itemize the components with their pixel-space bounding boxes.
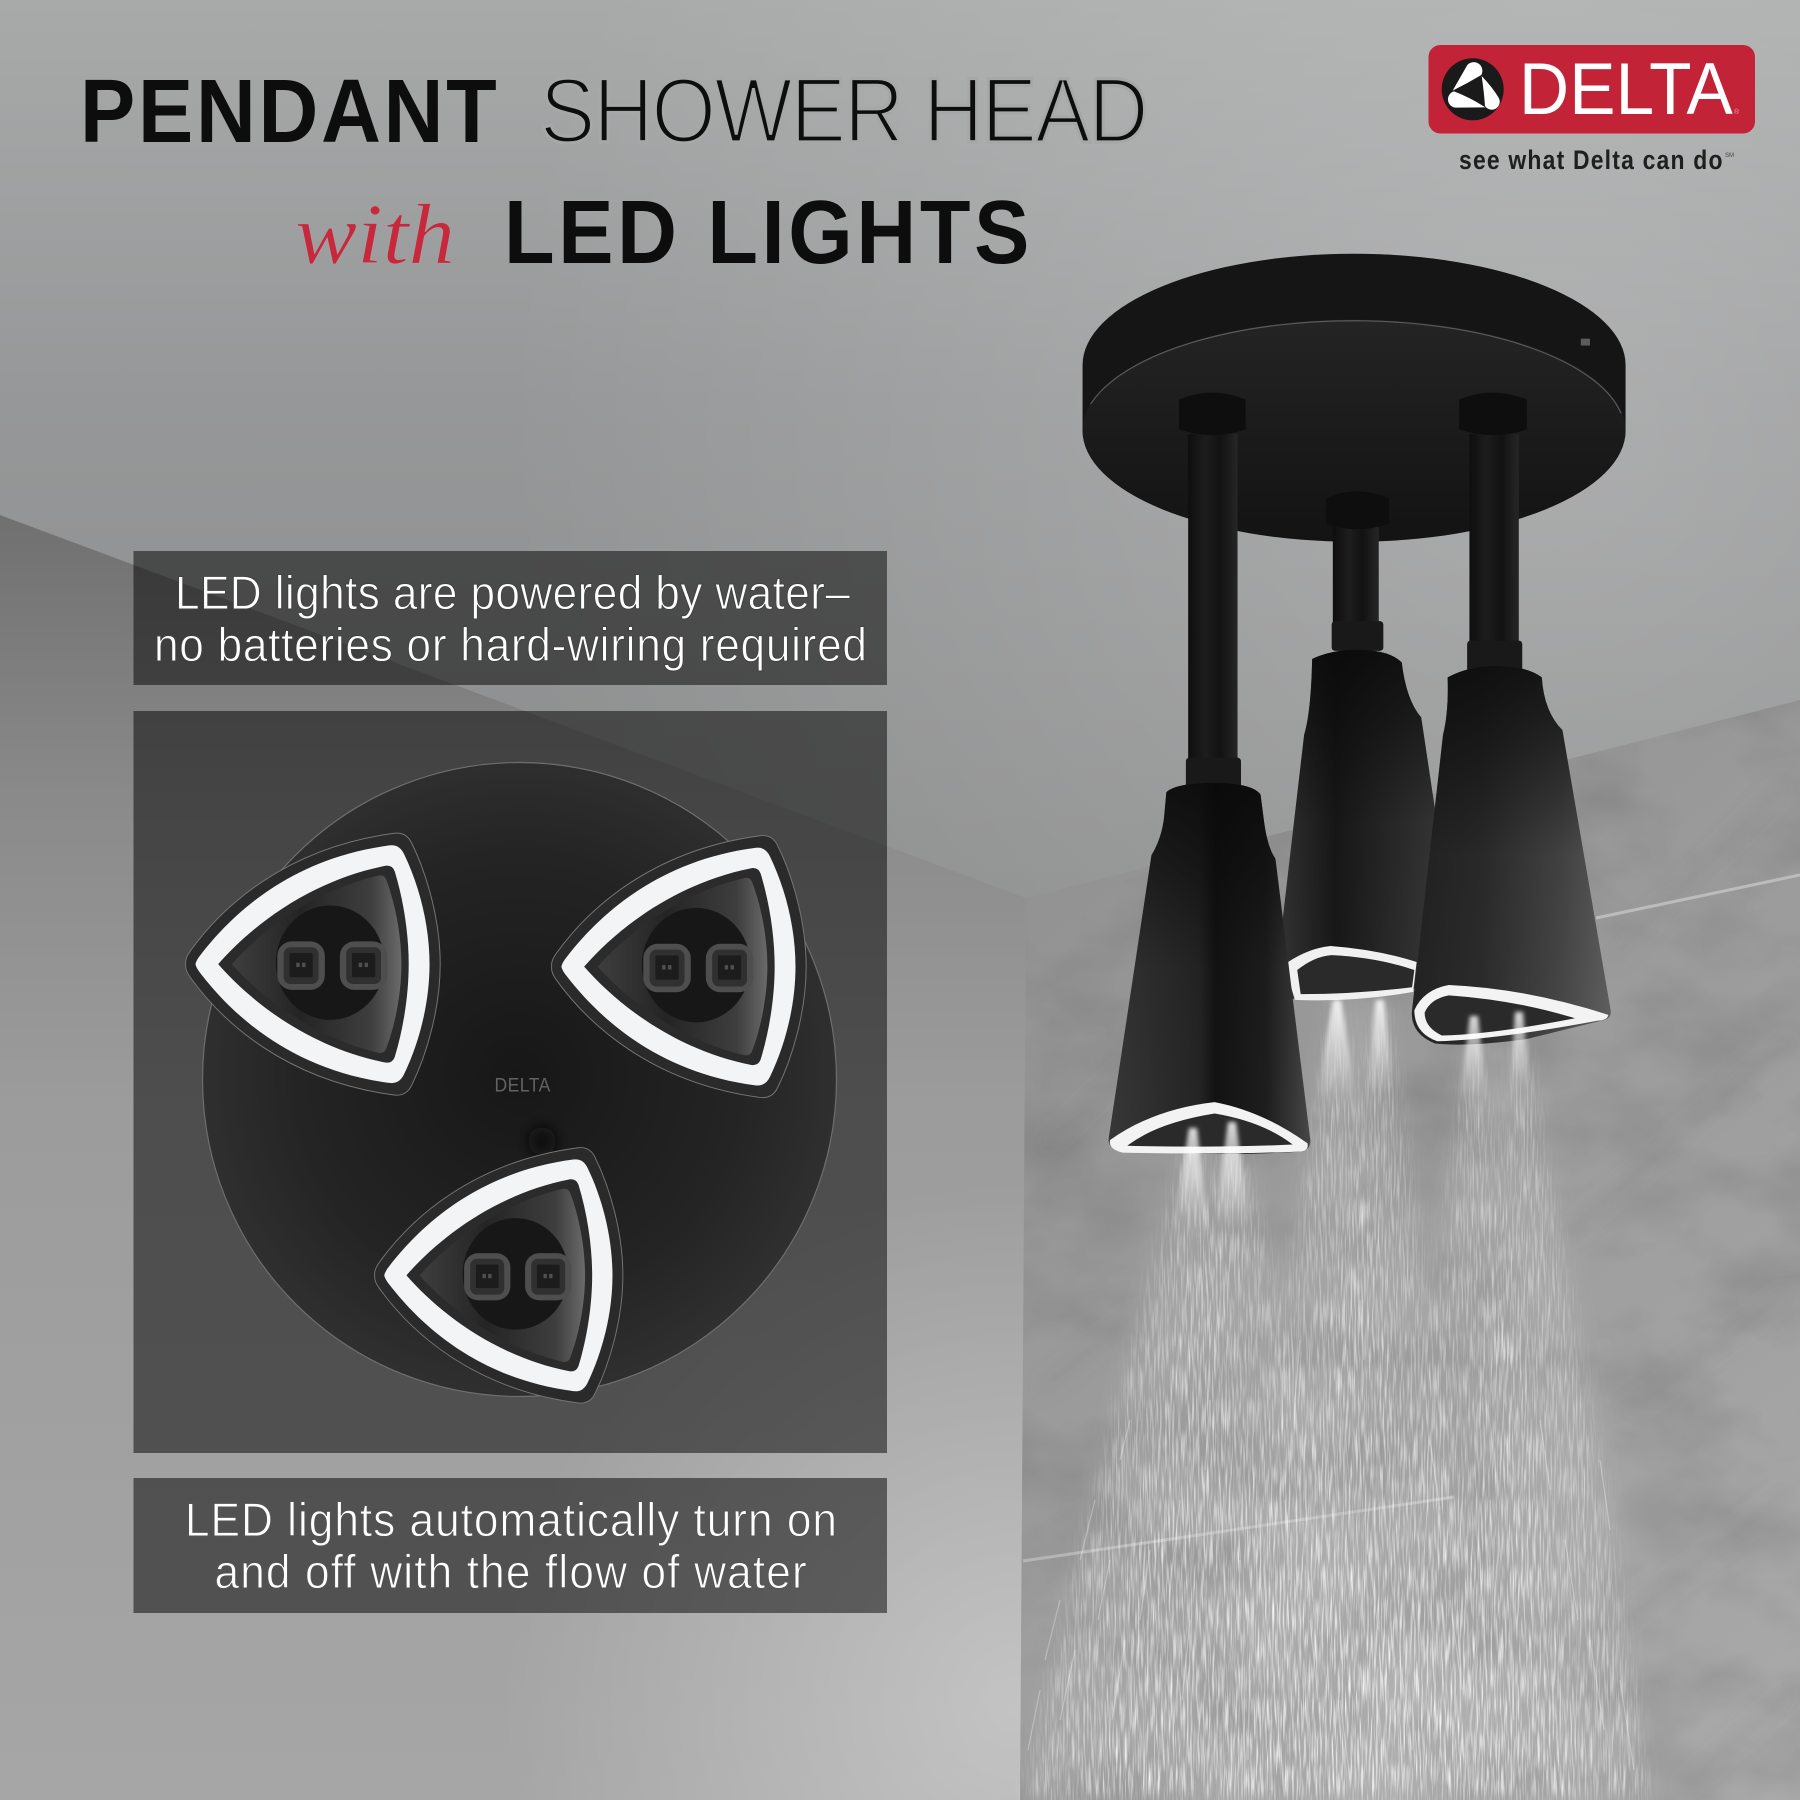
callout: automatic on and off bbox=[134, 1478, 887, 1613]
callout: powered by water bbox=[134, 551, 887, 685]
shower head product bbox=[1083, 254, 1626, 1154]
main title: with bbox=[295, 186, 455, 282]
right pendant bbox=[1412, 393, 1611, 1045]
faceplate disc: DELTA bbox=[494, 1074, 551, 1096]
Delta logo: SM bbox=[1725, 153, 1734, 159]
callout: automatic on and off: and off with the flow of water bbox=[214, 1546, 807, 1598]
water spray bbox=[1023, 1003, 1651, 1800]
LED ring spray faces bbox=[186, 833, 806, 1403]
Delta logo bbox=[1428, 45, 1755, 175]
callout: powered by water: LED lights are powered by water– bbox=[175, 567, 851, 619]
callout: automatic on and off: LED lights automatically turn on bbox=[185, 1494, 837, 1546]
callout: powered by water: no batteries or hard-wiring required bbox=[154, 619, 867, 671]
main title bbox=[80, 59, 1148, 283]
main title: SHOWER HEAD bbox=[540, 59, 1148, 162]
main title: LED LIGHTS bbox=[504, 183, 1029, 283]
Delta logo: see what Delta can do bbox=[1459, 145, 1723, 175]
marble shower wall bbox=[1020, 700, 1800, 1800]
panel: LED light close-up bbox=[134, 711, 887, 1453]
nozzle water beams bbox=[1173, 1000, 1530, 1230]
Delta logo: DELTA bbox=[1519, 49, 1733, 130]
middle pendant bbox=[1281, 491, 1437, 1000]
ceiling disc bbox=[1083, 254, 1626, 542]
left pendant bbox=[1109, 393, 1310, 1154]
Delta logo: ® bbox=[1734, 108, 1740, 116]
main title: PENDANT bbox=[80, 62, 497, 162]
faceplate disc bbox=[202, 762, 836, 1396]
